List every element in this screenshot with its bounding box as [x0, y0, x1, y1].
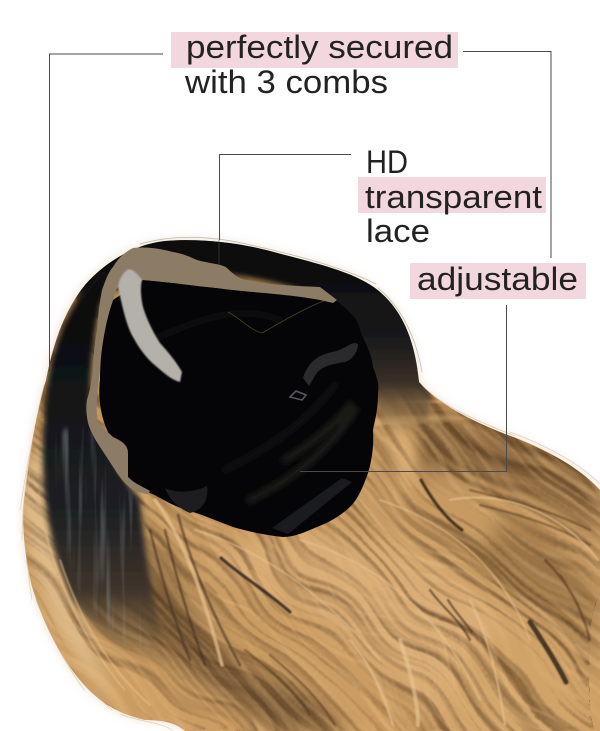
- hair mass: [0, 230, 600, 731]
- connector line: [300, 305, 506, 472]
- hair: grey strand sheen on left: [56, 426, 142, 650]
- comb lower right: [272, 478, 352, 534]
- soft hair fringe: [23, 240, 600, 731]
- connector line left: [50, 54, 163, 372]
- text: with 3 combs: with 3 combs: [184, 64, 388, 100]
- pink highlight: perfectly secured: [171, 32, 458, 68]
- connector line right: [463, 52, 551, 258]
- callout: perfectly secured with 3 combs: [50, 29, 551, 372]
- callout line passing through wig: lace: [218, 240, 220, 350]
- hair: light highlights: [45, 498, 598, 725]
- hair: sheared strand texture: [0, 230, 600, 731]
- pink highlight: transparent: [358, 177, 546, 213]
- text: HD: HD: [366, 144, 408, 180]
- wig photo illustration: [0, 230, 600, 731]
- stray lace hairs: [228, 298, 332, 333]
- hair: black roots at top and right: [70, 232, 430, 441]
- adjustable strap: [290, 343, 358, 400]
- comb strap lower left: [165, 486, 207, 513]
- connector line: [220, 154, 351, 240]
- wispy strands along the edge of the hair: [20, 237, 600, 730]
- text: perfectly secured: perfectly secured: [186, 29, 453, 65]
- hair: sheared highlight texture: [0, 430, 600, 731]
- hair: black left section: [43, 270, 170, 675]
- pink highlight: adjustable: [410, 263, 586, 299]
- hair: broad tonal regions: [20, 400, 600, 731]
- callout: adjustable: [300, 261, 578, 472]
- cap mesh shading: [150, 313, 355, 500]
- text: adjustable: adjustable: [417, 261, 578, 297]
- text: transparent: transparent: [365, 179, 542, 215]
- callout: HD transparent lace: [220, 144, 542, 249]
- text: lace: lace: [366, 213, 430, 249]
- hair: dark streaks: [150, 480, 590, 725]
- HD lace silver strip: [118, 269, 182, 382]
- wig cap interior: [99, 280, 378, 537]
- lace band: [86, 247, 337, 494]
